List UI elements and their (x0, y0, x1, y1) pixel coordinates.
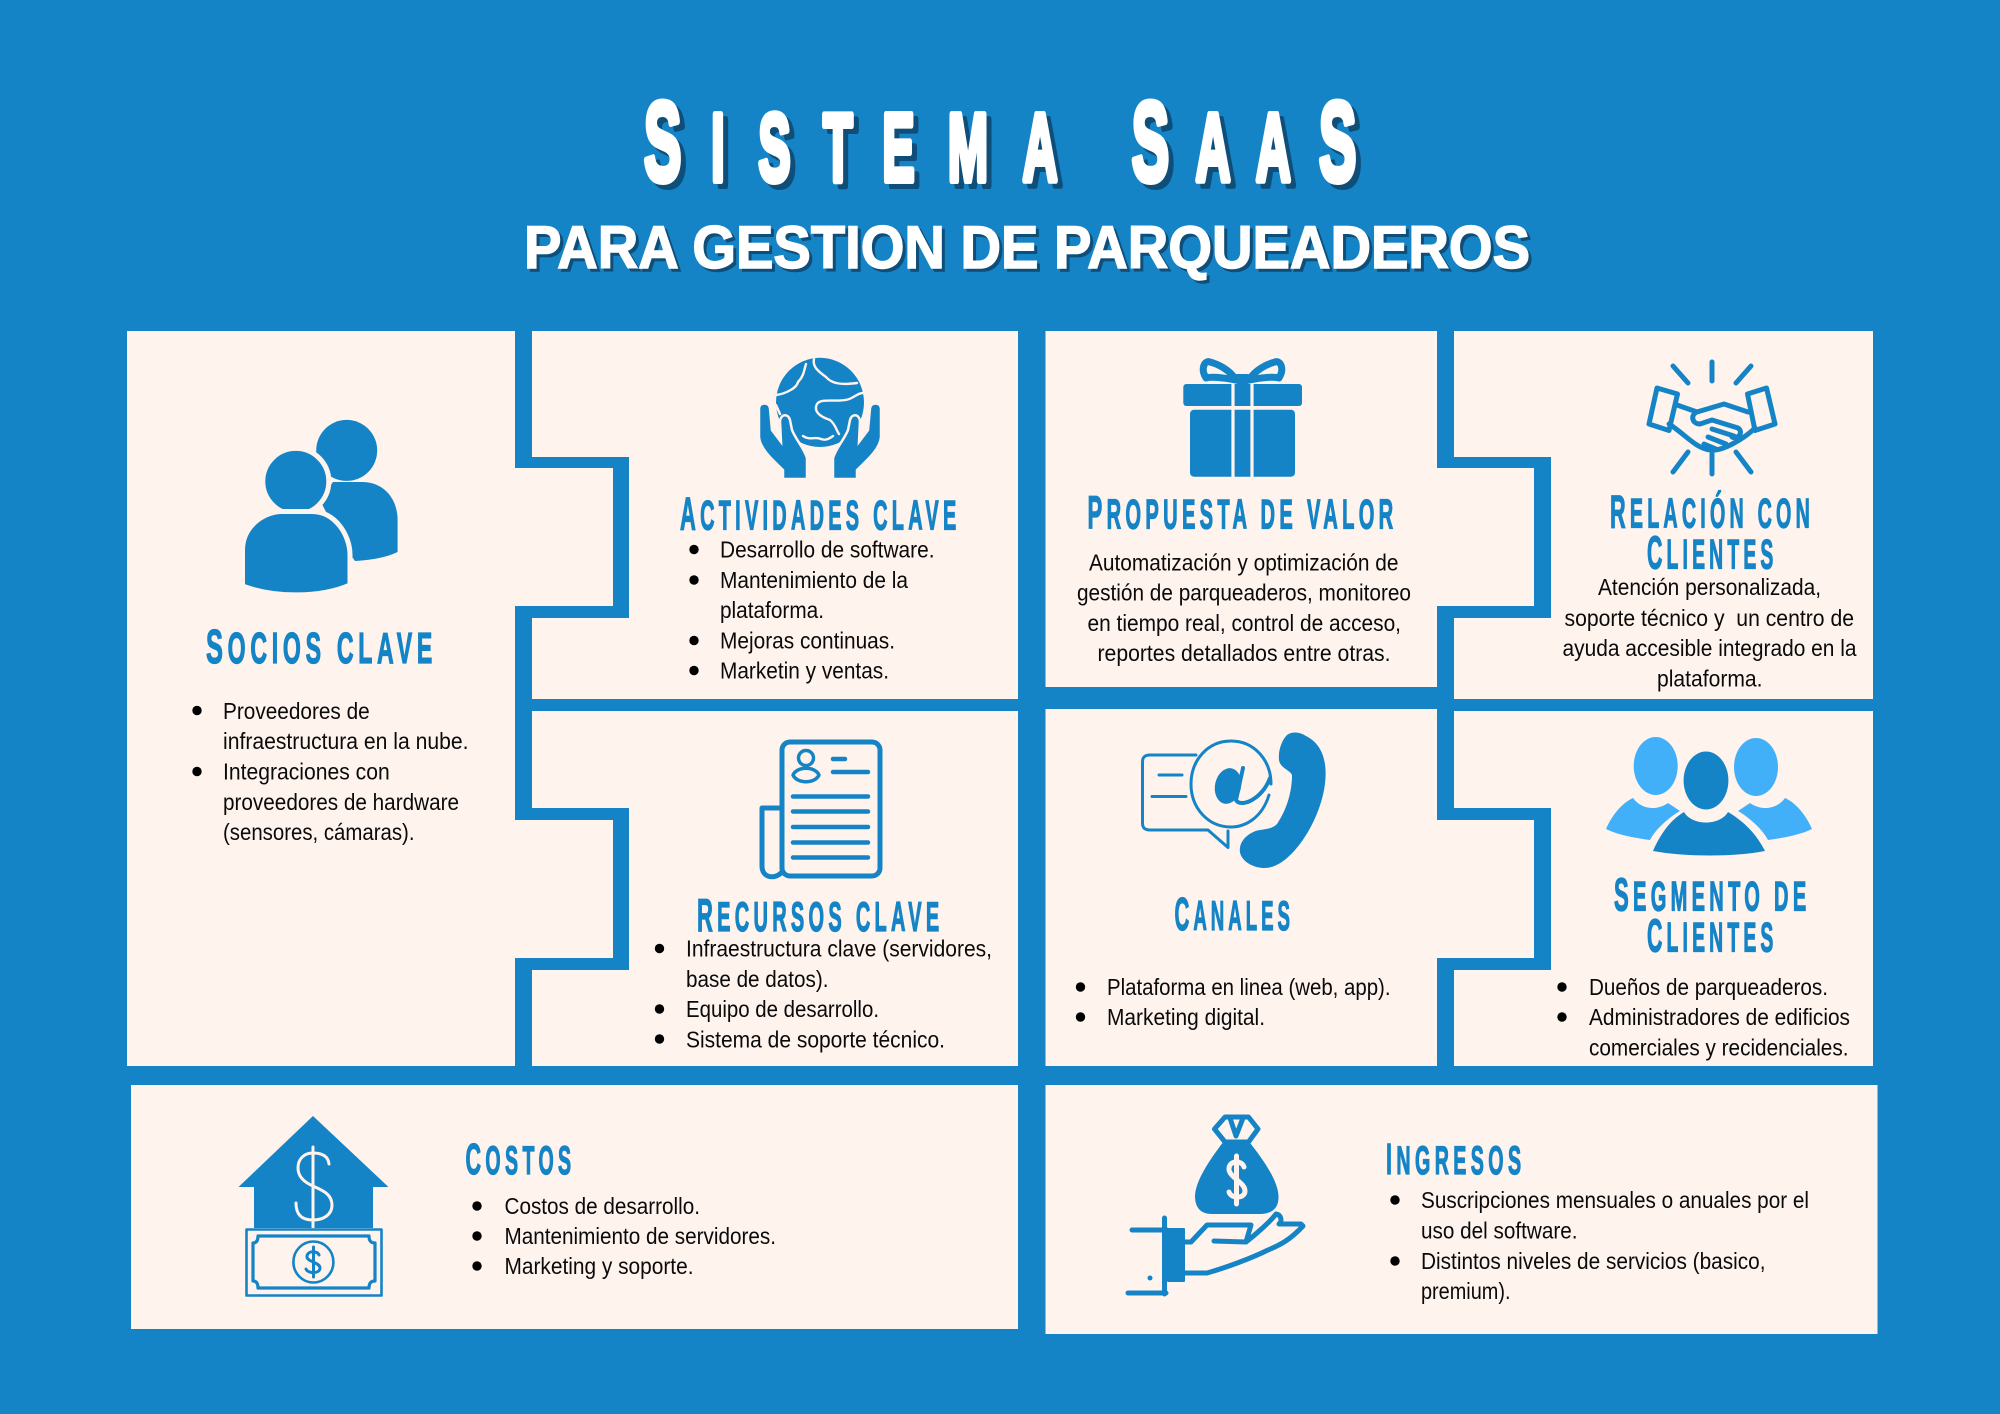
list: recursos clave: Equipo de desarrollo. (686, 996, 879, 1022)
heading: segmento de clientes (1614, 868, 1810, 962)
panel: socios clave (127, 331, 613, 1066)
list: ingresos: Distintos niveles de servicios (basico, (1421, 1248, 1766, 1274)
title: AA (1196, 94, 1291, 202)
panel: ingresos (1046, 1085, 1878, 1334)
text: relacion con clientes (1562, 574, 1857, 692)
list: segmento de clientes (1557, 974, 1850, 1060)
list: actividades clave: Marketin y ventas. (720, 658, 889, 684)
text: relacion con clientes: soporte técnico y un centro de (1564, 605, 1854, 631)
title: S (1319, 79, 1356, 205)
panel: recursos clave (532, 711, 1018, 1066)
list: canales (1076, 974, 1390, 1030)
list: actividades clave: Mejoras continuas. (720, 628, 895, 654)
panel: canales (1046, 709, 1534, 1066)
text: propuesta de valor: gestión de parqueaderos, monitoreo (1077, 580, 1411, 606)
panel: segmento de clientes (1454, 711, 1873, 1066)
list: actividades clave: plataforma. (720, 597, 824, 623)
panel background (1046, 331, 1534, 687)
panel background (532, 331, 1018, 699)
text: propuesta de valor: en tiempo real, control de acceso, (1088, 610, 1401, 636)
panel background (1454, 331, 1873, 699)
title (644, 79, 1356, 205)
text: propuesta de valor: Automatización y optimización de (1089, 550, 1398, 576)
list: socios clave: Integraciones con (223, 758, 390, 784)
list: recursos clave: Sistema de soporte técnico. (686, 1026, 945, 1052)
panel: recursos clave: RECURSOS CLAVE (697, 889, 944, 941)
icon: money bag on a hand (1128, 1117, 1303, 1294)
panel: actividades clave (532, 331, 1018, 699)
title: S (1132, 79, 1169, 205)
icon: hands holding globe (759, 358, 881, 479)
text: relacion con clientes: ayuda accesible integrado en la (1562, 635, 1857, 661)
list: ingresos (1390, 1187, 1809, 1304)
list: actividades clave: Mantenimiento de la (720, 567, 908, 593)
list: costos: Costos de desarrollo. (504, 1193, 700, 1219)
panel: relacion con clientes (1454, 331, 1873, 699)
text: relacion con clientes: plataforma. (1657, 666, 1762, 692)
panel: actividades clave: ACTIVIDADES CLAVE (680, 488, 960, 540)
list: socios clave: infraestructura en la nube. (223, 728, 468, 754)
icon: document with profile (762, 742, 880, 877)
heading: segmento de clientes: SEGMENTO DE (1614, 868, 1810, 920)
panel: propuesta de valor: PROPUESTA DE VALOR (1088, 486, 1398, 538)
list: ingresos: Suscripciones mensuales o anuales por el (1421, 1187, 1809, 1213)
list: socios clave: (sensores, cámaras). (223, 819, 414, 845)
panel background (1046, 1085, 1878, 1334)
panel background (127, 331, 613, 1066)
list: recursos clave: base de datos). (686, 966, 828, 992)
panel: costos (131, 1085, 1018, 1329)
panel: propuesta de valor (1046, 331, 1534, 687)
heading: relacion con clientes (1610, 486, 1814, 578)
list: socios clave: Proveedores de (223, 698, 370, 724)
list: actividades clave (689, 536, 934, 684)
heading: costos: COSTOS (466, 1135, 576, 1184)
title: ISTEMA (711, 94, 1088, 202)
icon: two people (242, 420, 398, 595)
list: segmento de clientes: comerciales y recidenciales. (1589, 1034, 1848, 1060)
list: socios clave: proveedores de hardware (223, 789, 459, 815)
text: propuesta de valor: reportes detallados entre otras. (1098, 640, 1390, 666)
list: canales: Plataforma en linea (web, app). (1107, 974, 1390, 1000)
list: ingresos: uso del software. (1421, 1218, 1578, 1244)
list: costos: Marketing y soporte. (504, 1253, 694, 1279)
icon: chat bubble, at sign and phone (1142, 732, 1326, 868)
title: S (644, 79, 681, 205)
list: recursos clave (655, 936, 992, 1052)
panel background (1046, 709, 1534, 1066)
subtitle: PARA GESTION DE PARQUEADEROS (524, 214, 1530, 281)
list: recursos clave: Infraestructura clave (servidores, (686, 936, 992, 962)
list: costos: Mantenimiento de servidores. (504, 1223, 776, 1249)
heading: socios clave: SOCIOS CLAVE (206, 620, 437, 674)
text: relacion con clientes: Atención personalizada, (1598, 574, 1821, 600)
list: canales: Marketing digital. (1107, 1004, 1265, 1030)
heading: relacion con clientes: CLIENTES (1647, 526, 1778, 578)
text: propuesta de valor (1077, 550, 1411, 666)
list: segmento de clientes: Administradores de edificios (1589, 1004, 1850, 1030)
panel: canales: CANALES (1174, 888, 1294, 940)
list: actividades clave: Desarrollo de software. (720, 536, 934, 562)
list: costos (472, 1193, 776, 1279)
list: socios clave (192, 698, 469, 845)
list: ingresos: premium). (1421, 1278, 1510, 1304)
icon: group of people (1606, 737, 1812, 856)
heading: ingresos: INGRESOS (1386, 1135, 1526, 1184)
panel background (131, 1085, 1018, 1329)
list: segmento de clientes: Dueños de parqueaderos. (1589, 974, 1828, 1000)
icon: gift box (1183, 362, 1302, 477)
panel background (532, 711, 1018, 1066)
heading: segmento de clientes: CLIENTES (1647, 910, 1778, 962)
panel background (1454, 711, 1873, 1066)
icon: house with dollar bill (238, 1116, 388, 1296)
icon: handshake (1649, 362, 1775, 474)
